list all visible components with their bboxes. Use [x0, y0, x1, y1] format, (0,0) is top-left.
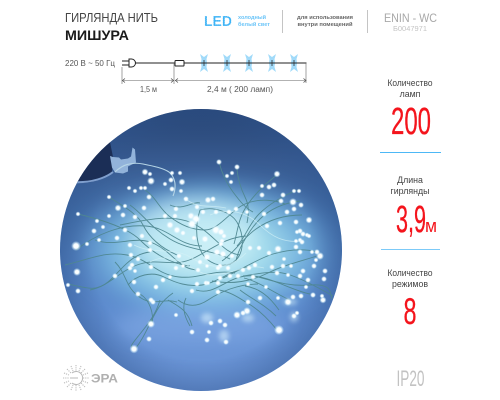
dimension labels: 1,5 м [140, 85, 157, 94]
soft glow [70, 174, 346, 346]
dimension lines [122, 63, 306, 84]
LED badge: холодный [238, 14, 266, 21]
divider [282, 10, 283, 33]
divider [367, 10, 368, 33]
icon: sunburst [63, 365, 89, 391]
stat: number of modes: режимов [392, 279, 428, 289]
model code: Б0047971 [393, 26, 427, 33]
stat: garland length [391, 175, 437, 241]
stat: garland length: 3,9 [396, 199, 426, 241]
protection rating: IP20 [396, 366, 424, 391]
logo: ЭРА: ЭРА [91, 372, 118, 386]
title: ГИРЛЯНДА НИТЬ [65, 11, 158, 25]
wiring diagram [122, 54, 306, 94]
usage note [297, 15, 353, 28]
dark corner [77, 142, 113, 183]
title [65, 11, 158, 43]
title: МИШУРА [65, 27, 129, 43]
divider [381, 249, 440, 250]
stat: number of modes: 8 [404, 291, 416, 332]
stat: number of lamps: 200 [391, 101, 431, 143]
stat: number of lamps: ламп [400, 89, 421, 99]
stat: number of modes: Количество [388, 268, 433, 278]
icon: plug [122, 59, 136, 67]
LED badge: LED [204, 14, 232, 30]
voltage label: 220 В ~ 50 Гц [65, 59, 115, 68]
reflections on the floor [201, 299, 298, 342]
icon: connector [175, 60, 184, 66]
divider [380, 152, 441, 153]
stat: garland length: Длина [397, 175, 423, 185]
stat: garland length: гирлянды [391, 186, 429, 196]
wire [136, 62, 306, 64]
stat: garland length: м [425, 216, 437, 236]
stat: number of lamps [388, 78, 433, 143]
model code [384, 11, 437, 33]
stat: number of lamps: Количество [388, 78, 433, 88]
usage note: для использования [297, 15, 353, 21]
white controller [110, 148, 136, 174]
wiring diagram: 2,4 м ( 200 ламп) [207, 85, 273, 94]
LED badge [204, 14, 270, 30]
photo: glowing garland circle [59, 109, 346, 391]
icon: light glows [200, 54, 298, 72]
model code: ENIN - WC [384, 11, 437, 25]
LED badge: белый свет [238, 21, 270, 28]
usage note: внутри помещений [298, 21, 352, 28]
wires [65, 162, 333, 349]
stat: number of modes [388, 268, 433, 332]
lights [66, 159, 328, 354]
logo: ЭРА [63, 365, 118, 391]
